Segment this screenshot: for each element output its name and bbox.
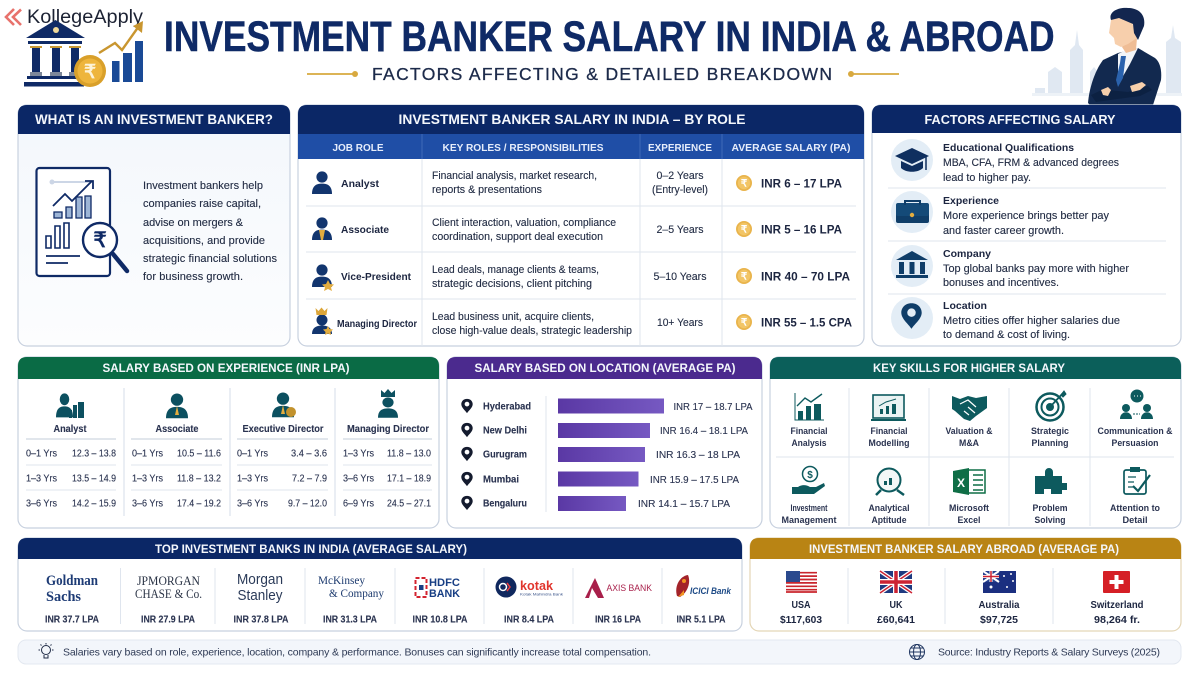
column: managing director: 3–6 Yrs (343, 474, 374, 484)
factor: company: bonuses and incentives. (943, 277, 1059, 289)
location bar chart: INR 16.3 – 18 LPA (656, 450, 740, 461)
panel heading: by role: INVESTMENT BANKER SALARY IN INDIA – BY ROLE (398, 111, 746, 127)
skill: microsoft excel (949, 468, 990, 526)
bank: axis bank: INR 16 LPA (595, 614, 641, 626)
table row: associate: Client interaction, valuation, compliance (432, 217, 616, 229)
factor: educational qualifications: MBA, CFA, FRM & advanced degrees (943, 157, 1119, 169)
skill: financial modelling: Modelling (868, 438, 910, 449)
column: analyst (26, 393, 116, 510)
bank: icici bank: INR 5.1 LPA (676, 614, 726, 626)
table row: analyst: Analyst (341, 178, 379, 190)
table row: associate: INR 5 – 16 LPA (761, 222, 842, 236)
skill: financial analysis: Analysis (792, 438, 826, 449)
table row: managing director (312, 308, 852, 337)
column: analyst: 3–6 Yrs (26, 498, 57, 510)
panel: salary based on experience (18, 357, 439, 528)
bank: jpmorgan chase: CHASE & Co. (135, 586, 202, 601)
location bar chart: Hyderabad (483, 402, 531, 412)
factor: location: Metro cities offer higher salaries due (943, 315, 1120, 327)
bank: goldman sachs (45, 573, 99, 626)
panel heading: experience (18, 357, 439, 379)
panel: what is an investment banker (18, 105, 290, 346)
column: executive director: 3.4 – 3.6 (291, 448, 327, 460)
bank: morgan stanley: INR 37.8 LPA (234, 614, 288, 626)
table row: analyst: 0–2 Years (656, 170, 704, 182)
text block: definition: advise on mergers & (143, 217, 244, 229)
table row: associate: coordination, support deal execution (432, 231, 603, 243)
column: managing director (343, 389, 431, 510)
column: managing director: Managing Director (347, 424, 429, 435)
bank: icici bank: ICICI Bank (690, 586, 732, 596)
column: executive director (237, 392, 327, 510)
country: UK (877, 571, 915, 626)
country: Australia (978, 571, 1020, 626)
factor: educational qualifications: Educational Qualifications (943, 142, 1074, 154)
bank: jpmorgan chase: JPMORGAN (137, 573, 201, 588)
factor: educational qualifications: lead to higher pay. (943, 172, 1031, 184)
skill: problem solving puzzle: Problem (1032, 503, 1068, 514)
panel: salary abroad (750, 538, 1181, 631)
bank: morgan stanley (234, 571, 288, 626)
panel heading: abroad (750, 538, 1181, 559)
table row: vice-president: 5–10 Years (654, 271, 707, 283)
panel heading: location: SALARY BASED ON LOCATION (AVERAGE PA) (474, 361, 736, 375)
skill: investment management: $ (807, 470, 813, 481)
bank: hdfc bank: HDFC (429, 577, 460, 589)
skill: problem solving puzzle: Solving (1034, 515, 1066, 526)
skill: attention to detail: Detail (1122, 515, 1148, 526)
skill: investment management (782, 466, 837, 526)
factor: company (891, 245, 1129, 289)
column: managing director: 24.5 – 27.1 (387, 498, 431, 510)
panel heading: factors: FACTORS AFFECTING SALARY (924, 112, 1116, 127)
skill: communication and persuasion (1098, 390, 1173, 449)
icon: bank with rupee coin and growth chart (24, 20, 143, 87)
location bar chart: New Delhi (483, 426, 527, 436)
column: managing director: 6–9 Yrs (343, 498, 374, 510)
column: managing director: 11.8 – 13.0 (387, 448, 431, 460)
bank: morgan stanley: Stanley (238, 587, 283, 604)
table row: vice-president: strategic decisions, client pitching (432, 278, 592, 290)
bank: goldman sachs: Goldman (46, 573, 99, 589)
table row: vice-president (312, 264, 850, 291)
text block: definition: Investment bankers help (143, 180, 263, 192)
icon: globe (910, 644, 924, 660)
panel: salary in india by role (298, 105, 864, 346)
skill: financial analysis (790, 393, 828, 449)
location bar chart: Gurugram (483, 450, 527, 460)
skill: microsoft excel: X (957, 476, 965, 490)
bank: kotak (496, 576, 563, 626)
table row: managing director: INR 55 – 1.5 CPA (761, 316, 852, 330)
table row: vice-president: Lead deals, manage clients & teams, (432, 264, 599, 276)
title: INVESTMENT BANKER SALARY IN INDIA & ABROAD (164, 13, 1055, 61)
bank: mckinsey and company (318, 573, 384, 626)
icon: report with magnifier: ₹ (93, 229, 107, 252)
skill: valuation and M&A handshake: M&A (959, 438, 979, 449)
bank: morgan stanley: Morgan (237, 571, 283, 588)
column: associate: 17.4 – 19.2 (177, 498, 221, 510)
bank: axis bank: AXIS BANK (606, 583, 652, 593)
factor: company: Top global banks pay more with higher (943, 263, 1129, 275)
bank: kotak: kotak (520, 578, 554, 593)
illustration: city skyline (1032, 25, 1182, 96)
panel: key skills (770, 357, 1181, 528)
table row: vice-president: Vice-President (341, 271, 411, 283)
country: Australia: $97,725 (980, 614, 1018, 626)
panel: factors affecting salary (872, 105, 1181, 346)
column: analyst: Analyst (54, 424, 87, 435)
skill: attention to detail (1110, 467, 1160, 526)
bank: kotak: INR 8.4 LPA (504, 614, 554, 626)
location bar chart: INR 17 – 18.7 LPA (674, 402, 753, 413)
table header row: JOB ROLE (332, 142, 384, 154)
factor: location (891, 297, 1120, 341)
table row: analyst: Financial analysis, market research, (432, 170, 597, 182)
skill: analytical aptitude: Aptitude (872, 515, 906, 526)
bank: axis bank (585, 578, 652, 626)
icon: bank with rupee coin and growth chart: ₹ (84, 62, 96, 83)
column: analyst: 0–1 Yrs (26, 448, 57, 460)
table row: analyst: (Entry-level) (652, 184, 708, 196)
panel heading: key skills: KEY SKILLS FOR HIGHER SALARY (873, 361, 1065, 375)
column: analyst: 1–3 Yrs (26, 474, 57, 484)
factor: educational qualifications (891, 139, 1119, 184)
skill: analytical aptitude: Analytical (868, 503, 910, 514)
bank: kotak: Kotak Mahindra Bank (520, 592, 563, 596)
skill: investment management: Investment (790, 503, 828, 514)
column: executive director: Executive Director (242, 424, 324, 435)
column: executive director: 1–3 Yrs (237, 474, 268, 484)
table row: associate: 2–5 Years (656, 224, 704, 236)
panel heading: abroad: INVESTMENT BANKER SALARY ABROAD (AVERAGE PA) (809, 542, 1119, 556)
panel heading: what is: WHAT IS AN INVESTMENT BANKER? (35, 112, 273, 127)
country: Switzerland: Switzerland (1090, 599, 1144, 611)
skill: strategic planning target: Planning (1032, 438, 1069, 449)
column: managing director: 1–3 Yrs (343, 448, 374, 460)
column: associate (132, 393, 221, 510)
column: analyst: 13.5 – 14.9 (72, 474, 116, 484)
country: Switzerland (1090, 571, 1144, 626)
bank: goldman sachs: INR 37.7 LPA (45, 614, 99, 626)
skill: financial analysis: Financial (790, 426, 828, 437)
panel heading: banks: TOP INVESTMENT BANKS IN INDIA (AVERAGE SALARY) (155, 542, 467, 556)
bank: mckinsey and company: McKinsey (318, 573, 365, 587)
country: UK: UK (890, 599, 903, 611)
bank: jpmorgan chase: INR 27.9 LPA (141, 614, 195, 626)
bank: mckinsey and company: INR 31.3 LPA (323, 614, 377, 626)
panel: top investment banks (18, 538, 742, 631)
factor: experience: Experience (943, 195, 999, 207)
column: executive director: 3–6 Yrs (237, 498, 268, 510)
panel heading: by role (298, 105, 864, 134)
bank: icici bank (676, 575, 732, 626)
bank: jpmorgan chase (135, 573, 202, 626)
table header row: KEY ROLES / RESPONSIBILITIES (442, 142, 604, 154)
panel heading: what is (18, 105, 290, 134)
skill: investment management: Management (782, 515, 837, 526)
country: Switzerland: 98,264 fr. (1094, 614, 1140, 626)
column: executive director: 0–1 Yrs (237, 448, 268, 460)
text block: definition: companies raise capital, (143, 198, 261, 210)
table row: managing director: Lead business unit, acquire clients, (432, 311, 594, 323)
factor: experience: and faster career growth. (943, 225, 1064, 237)
text block: definition (143, 180, 278, 283)
text block: definition: acquisitions, and provide (143, 235, 265, 247)
table header row: AVERAGE SALARY (PA) (732, 142, 850, 154)
table row: managing director: close high-value deals, strategic leadership (432, 325, 632, 337)
column: associate: 1–3 Yrs (132, 474, 163, 484)
column: analyst: 14.2 – 15.9 (72, 498, 116, 510)
column: executive director: 7.2 – 7.9 (292, 474, 327, 484)
location bar chart (461, 398, 753, 511)
country: USA: $117,603 (780, 614, 822, 626)
panel heading: experience: SALARY BASED ON EXPERIENCE (INR LPA) (102, 361, 350, 375)
country: USA: USA (792, 599, 811, 611)
skill: microsoft excel: Excel (958, 515, 980, 526)
icon: report with magnifier (36, 168, 127, 276)
factor: experience (891, 191, 1109, 237)
column: associate: 3–6 Yrs (132, 498, 163, 510)
skill: problem solving puzzle (1032, 468, 1068, 526)
footer note text: Salaries vary based on role, experience, location, company & performance. Bonuses can significantly increase total compensation. (63, 646, 651, 658)
factor: company: Company (943, 248, 991, 260)
column: managing director: 17.1 – 18.9 (387, 474, 431, 484)
text block: definition: strategic financial solutions (143, 253, 278, 265)
skill: valuation and M&A handshake: Valuation & (946, 426, 993, 437)
column: associate: 10.5 – 11.6 (177, 448, 221, 460)
factor: experience: More experience brings better pay (943, 210, 1109, 222)
header logo: KollegeApply: KollegeApply (27, 7, 144, 28)
table row: associate: Associate (341, 224, 389, 236)
table row: associate (312, 217, 842, 243)
footer note bar (18, 640, 1181, 664)
skill: communication and persuasion: Communication & (1098, 426, 1173, 437)
bank: hdfc bank: BANK (429, 588, 460, 600)
skill: financial modelling: Financial (870, 426, 908, 437)
skill: strategic planning target: Strategic (1031, 426, 1069, 437)
bank: goldman sachs: Sachs (46, 589, 81, 605)
column: associate: 11.8 – 13.2 (177, 474, 221, 484)
text block: definition: for business growth. (143, 271, 243, 283)
table row: managing director: Managing Director (337, 318, 417, 330)
column: analyst: 12.3 – 13.8 (72, 448, 116, 460)
panel: salary based on location (447, 357, 762, 528)
bank: hdfc bank: INR 10.8 LPA (412, 614, 468, 626)
location bar chart: INR 16.4 – 18.1 LPA (660, 426, 748, 437)
panel heading: location (447, 357, 762, 379)
panel heading: factors (872, 105, 1181, 133)
skill: financial modelling (868, 395, 910, 449)
illustration: businessman with arms crossed (1088, 8, 1161, 105)
panel heading: banks (18, 538, 742, 559)
source text: Source: Industry Reports & Salary Surveys (2025) (938, 646, 1160, 658)
table row: analyst: reports & presentations (432, 184, 542, 196)
table row: analyst (312, 170, 842, 196)
skill: microsoft excel: Microsoft (949, 503, 990, 514)
table row: vice-president: INR 40 – 70 LPA (761, 270, 850, 284)
location bar chart: INR 14.1 – 15.7 LPA (638, 499, 730, 510)
skill: attention to detail: Attention to (1110, 503, 1160, 514)
panel heading: key skills (770, 357, 1181, 379)
country: Australia: Australia (978, 599, 1020, 611)
icon: light bulb (38, 643, 54, 658)
skill: communication and persuasion: Persuasion (1112, 438, 1159, 449)
factor: location: Location (943, 300, 987, 312)
table header row: EXPERIENCE (648, 142, 712, 154)
country: USA (780, 571, 822, 626)
bank: hdfc bank (412, 577, 468, 626)
column: associate: 0–1 Yrs (132, 448, 163, 460)
skill: valuation and M&A handshake (946, 396, 993, 449)
location bar chart: Bengaluru (483, 498, 527, 510)
skill: analytical aptitude (868, 468, 910, 526)
column: associate: Associate (156, 424, 199, 435)
table row: managing director: 10+ Years (657, 317, 703, 329)
column: executive director: 9.7 – 12.0 (288, 498, 327, 510)
bank: mckinsey and company: & Company (329, 586, 384, 600)
table header row (298, 134, 864, 159)
location bar chart: INR 15.9 – 17.5 LPA (650, 475, 739, 486)
table row: analyst: INR 6 – 17 LPA (761, 176, 842, 190)
skill: strategic planning target (1031, 391, 1069, 449)
country: UK: £60,641 (877, 614, 915, 626)
location bar chart: Mumbai (483, 474, 519, 486)
factor: location: to demand & cost of living. (943, 329, 1070, 341)
subtitle with gold rules: FACTORS AFFECTING & DETAILED BREAKDOWN (372, 64, 832, 84)
